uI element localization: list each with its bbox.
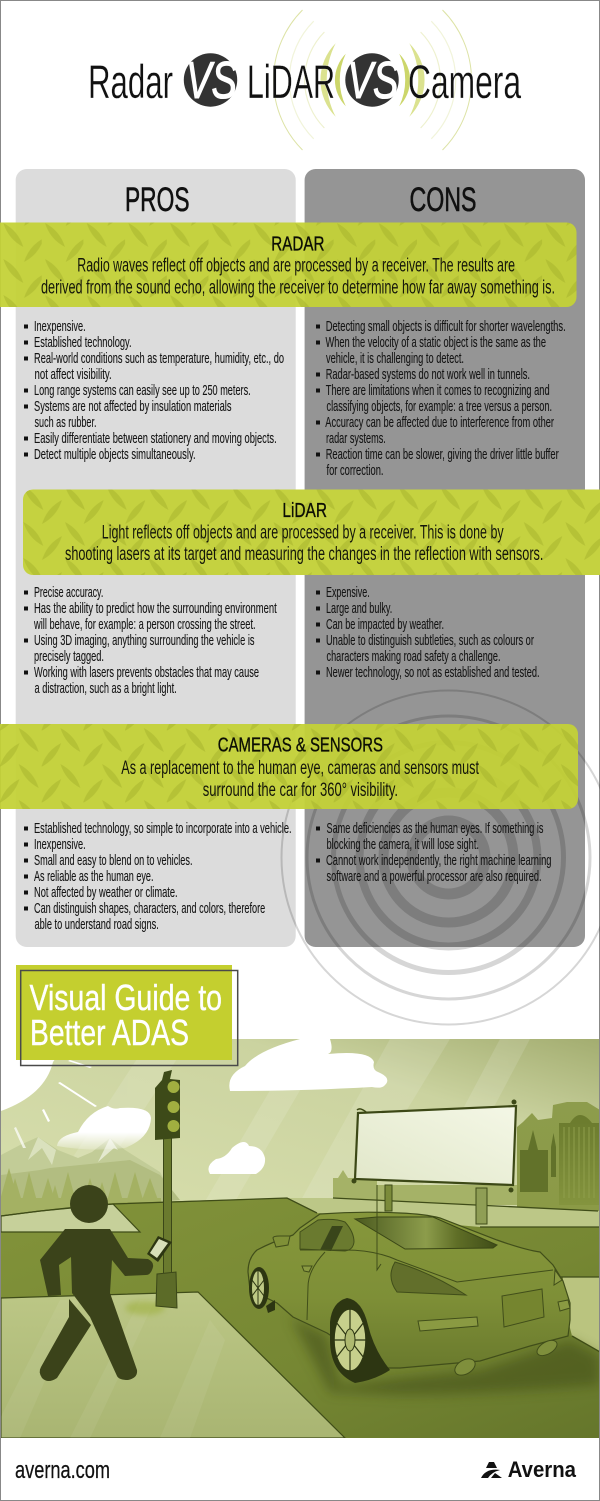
footer url: averna.com <box>15 1457 110 1484</box>
radar pros list: Systems are not affected by insulation materials <box>34 399 232 415</box>
lidar cons list: Can be impacted by weather. <box>326 617 444 633</box>
panel: cons <box>305 169 585 947</box>
car <box>248 1185 600 1395</box>
smartphone <box>147 1236 172 1262</box>
cameras description <box>121 758 479 801</box>
horizon and curb lines <box>1 1198 600 1352</box>
billboard <box>352 1100 516 1224</box>
glow at pole base <box>125 1301 165 1315</box>
illustration: street scene <box>0 1039 600 1438</box>
lidar cons list: Large and bulky. <box>326 601 392 617</box>
title word: Camera: Camera <box>408 55 522 108</box>
radar pros list: Inexpensive. <box>34 319 86 335</box>
lidar cons list <box>316 585 540 681</box>
radar cons list: radar systems. <box>326 431 386 447</box>
band: radar <box>0 222 576 307</box>
cameras pros list: Can distinguish shapes, characters, and colors, therefore <box>34 901 265 917</box>
heading: PROS: PROS <box>125 181 190 219</box>
pine trees <box>0 1168 161 1220</box>
cameras pros list: Not affected by weather or climate. <box>34 885 178 901</box>
sky <box>1 1039 599 1219</box>
lidar cons list: characters making road safety a challenge. <box>326 649 500 665</box>
title word: LiDAR: LiDAR <box>247 55 335 108</box>
bumper reflector <box>418 1317 478 1331</box>
logo wordmark: Averna <box>508 1457 577 1482</box>
radar pros list: Real-world conditions such as temperature, humidity, etc., do <box>34 351 284 367</box>
rear wheel <box>330 1298 390 1383</box>
averna logo <box>481 1457 577 1482</box>
door handle <box>302 1266 312 1272</box>
sun rays <box>74 1039 530 1200</box>
cameras pros list: Inexpensive. <box>34 837 86 853</box>
radar cons list: for correction. <box>326 463 384 479</box>
side mirror <box>273 1236 290 1247</box>
concentric rings graphic <box>282 690 600 1024</box>
traffic light <box>155 1070 180 1308</box>
lidar pros list: Precise accuracy. <box>34 585 103 601</box>
distant city skyline <box>333 1102 600 1212</box>
radar description <box>41 256 555 298</box>
title word: Radar: Radar <box>88 55 173 108</box>
VS badge 1: VS <box>186 52 237 110</box>
front wheel <box>249 1267 275 1313</box>
radar pros list: Established technology. <box>34 335 132 351</box>
crossing island left <box>1 1204 140 1232</box>
logo icon <box>481 1462 502 1478</box>
white clouds <box>1 1039 387 1174</box>
car shadow <box>290 1316 600 1395</box>
signal waves <box>274 10 471 150</box>
lidar pros list: Using 3D imaging, anything surrounding the vehicle is <box>34 633 254 649</box>
cameras pros list <box>24 821 292 933</box>
pedestrian <box>40 1185 153 1381</box>
cameras pros list: As reliable as the human eye. <box>34 869 154 885</box>
sidewalk <box>1 1292 345 1438</box>
cameras pros list: Small and easy to blend on to vehicles. <box>34 853 192 869</box>
head <box>70 1185 108 1223</box>
mountains <box>1 1137 180 1202</box>
heading: visual guide <box>16 965 238 1066</box>
torso and arms <box>40 1229 153 1380</box>
lidar pros list: precisely tagged. <box>34 649 104 665</box>
lidar heading: LiDAR <box>282 499 327 522</box>
car body <box>248 1212 570 1368</box>
title with signal waves <box>88 10 522 150</box>
exhausts <box>454 1358 476 1376</box>
antenna wire <box>377 1185 381 1270</box>
radar pros list: not affect visibility. <box>34 367 112 383</box>
lidar pros list <box>24 585 277 697</box>
band: cameras and sensors <box>0 724 578 809</box>
lidar description <box>65 522 543 565</box>
cameras pros list: Established technology, so simple to incorporate into a vehicle. <box>34 821 292 837</box>
cameras description: surround the car for 360° visibility. <box>203 780 398 801</box>
right side lights <box>554 1270 570 1311</box>
cameras pros list: able to understand road signs. <box>34 917 159 933</box>
cameras cons list: blocking the camera, it will lose sight. <box>326 837 479 853</box>
rear windshield <box>355 1217 497 1249</box>
heading: CONS: CONS <box>410 181 476 219</box>
tail light <box>391 1262 466 1295</box>
lidar pros list: Has the ability to predict how the surrounding environment <box>34 601 277 617</box>
radar pros list: Long range systems can easily see up to 250 meters. <box>34 383 251 399</box>
radar cons list: vehicle, it is challenging to detect. <box>326 351 464 367</box>
cameras heading: CAMERAS & SENSORS <box>218 734 383 756</box>
band: lidar <box>23 490 600 575</box>
radar heading: RADAR <box>271 232 324 256</box>
cameras cons list <box>316 821 552 885</box>
road <box>1 1198 600 1438</box>
radar pros list: Easily differentiate between stationery and moving objects. <box>34 431 277 447</box>
radar pros list: such as rubber. <box>34 415 96 431</box>
lidar pros list: will behave, for example: a person crossing the street. <box>33 617 256 633</box>
car body lines <box>300 1250 553 1320</box>
licence plate recess <box>502 1289 544 1327</box>
lidar pros list: a distraction, such as a bright light. <box>34 681 177 697</box>
radar pros list: Detect multiple objects simultaneously. <box>34 447 196 463</box>
heading: visual guide: Better ADAS <box>30 1012 189 1053</box>
heading: visual guide: Visual Guide to <box>30 977 222 1018</box>
sidewalk streaks <box>1 1411 200 1438</box>
side window <box>300 1219 354 1251</box>
pale ground strip right <box>287 1198 600 1227</box>
VS badge 2: VS <box>348 52 399 110</box>
radar pros list <box>24 319 284 463</box>
lidar pros list: Working with lasers prevents obstacles that may cause <box>34 665 259 681</box>
panel: pros <box>16 169 296 947</box>
radar cons list <box>316 319 566 479</box>
rear leg <box>40 1299 91 1381</box>
right sidewalk <box>563 1277 600 1352</box>
lidar cons list: Expensive. <box>326 585 370 601</box>
